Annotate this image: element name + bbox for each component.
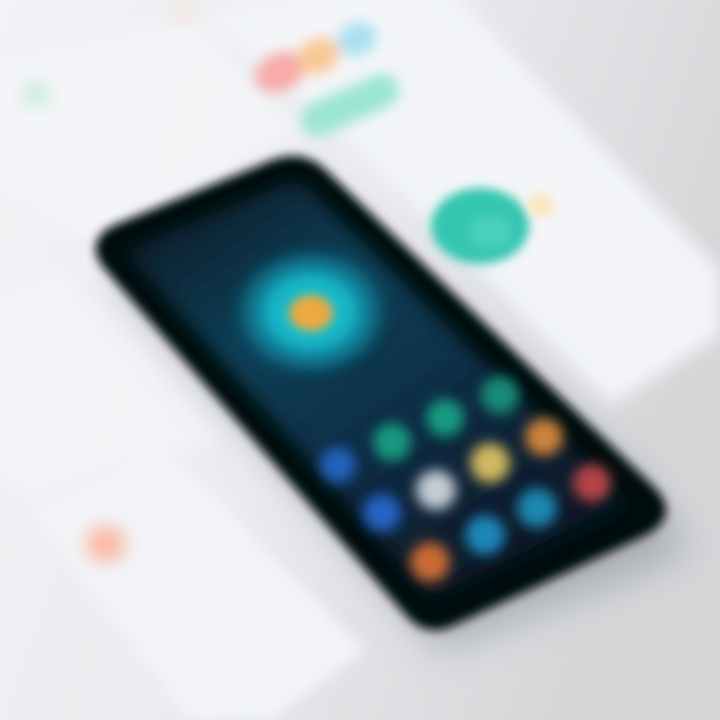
phone screen [131,183,623,595]
icon: teal glow on screen [229,244,393,380]
icon: faint peach mark [170,4,194,24]
panel: lower-left paper card [30,448,365,720]
panel: upper-left paper card [0,20,300,240]
phone body [96,156,666,630]
icon: orange blob on lower card [86,526,126,562]
pill: green tag [296,68,404,142]
app icon grid [320,376,611,582]
panel: left paper card [0,270,220,500]
panel: upper-right paper card [205,0,720,405]
icon: orange centre [289,295,333,331]
icon: small green dot [23,82,49,106]
icon: teal circle badge [431,188,529,264]
phone shadow [110,190,690,650]
pill group: coloured tags [249,16,382,100]
icon: small yellow accent [528,193,554,217]
